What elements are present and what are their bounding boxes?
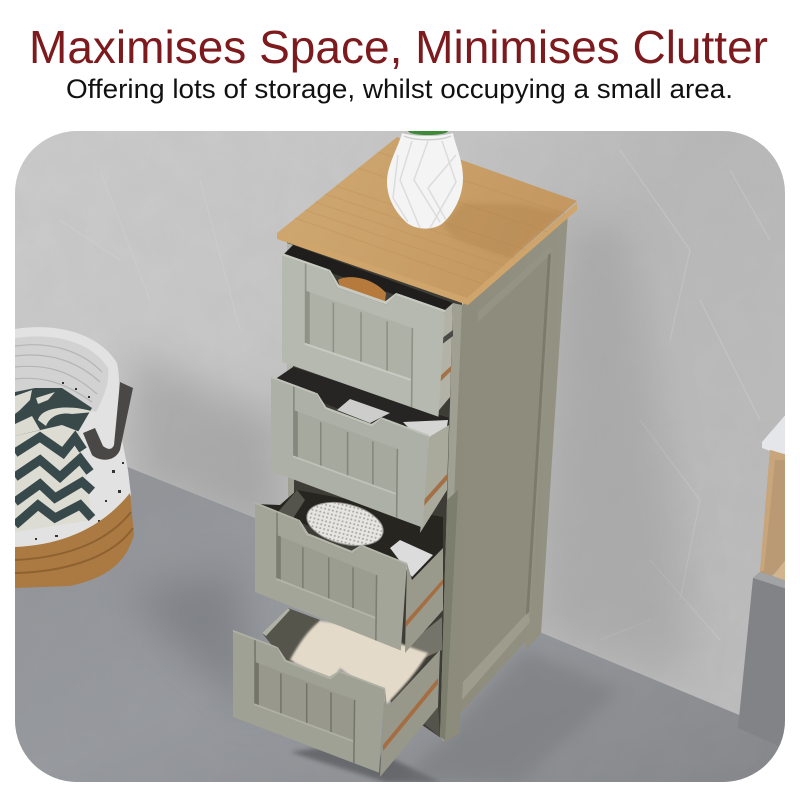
towel (290, 621, 428, 704)
panel: product photo (15, 127, 787, 782)
book (390, 540, 433, 577)
subtitle: Offering lots of storage, whilst occupying a small area. (66, 74, 733, 104)
top surface (277, 137, 577, 298)
front post (440, 303, 462, 742)
drawer 4 interior (262, 608, 320, 668)
drawer 3 interior (255, 490, 443, 580)
jute base (15, 493, 134, 588)
top edge (277, 203, 577, 305)
floor shadow (144, 570, 253, 698)
drawer 1 side (435, 303, 453, 415)
cabinet (233, 127, 577, 777)
book (337, 399, 390, 423)
lower unit (738, 572, 787, 750)
basket speckles (35, 382, 124, 540)
drawer 1 (282, 245, 453, 419)
drawer 2 (271, 367, 449, 533)
drawer 2 interior (271, 367, 449, 455)
floor (15, 467, 784, 782)
side inset panel (463, 255, 550, 682)
basket exterior (15, 327, 131, 550)
drawer 4 (233, 608, 440, 777)
drawer 4 front (233, 630, 385, 775)
cabinet side panel (440, 213, 568, 742)
drawer 3 side (405, 548, 443, 653)
basket handle (83, 382, 133, 460)
vase shadow (446, 204, 562, 254)
drawer 2 front (271, 376, 429, 530)
drawer 2 side (420, 425, 449, 533)
basket interior (15, 336, 108, 412)
drawer 1 handle (338, 277, 386, 302)
drawer 3 front (255, 502, 407, 653)
towel in basket (15, 388, 92, 436)
wall (15, 131, 785, 782)
chevron towel (15, 425, 92, 532)
white worktop (762, 416, 785, 454)
cabinet front opening (287, 240, 462, 740)
magazines (403, 420, 448, 450)
basket (15, 327, 134, 588)
plant (408, 131, 448, 135)
drawer 1 front (282, 253, 445, 419)
right side cabinet (738, 413, 787, 750)
vase (387, 127, 463, 229)
wall shadow (540, 215, 690, 680)
wood frame (760, 450, 787, 576)
drawer 1 interior (282, 245, 453, 345)
brush (306, 502, 384, 546)
drawer 4 side (380, 650, 440, 777)
title: Maximises Space, Minimises Clutter (29, 21, 768, 73)
wood top (277, 137, 577, 305)
drawer 3 (255, 490, 443, 653)
